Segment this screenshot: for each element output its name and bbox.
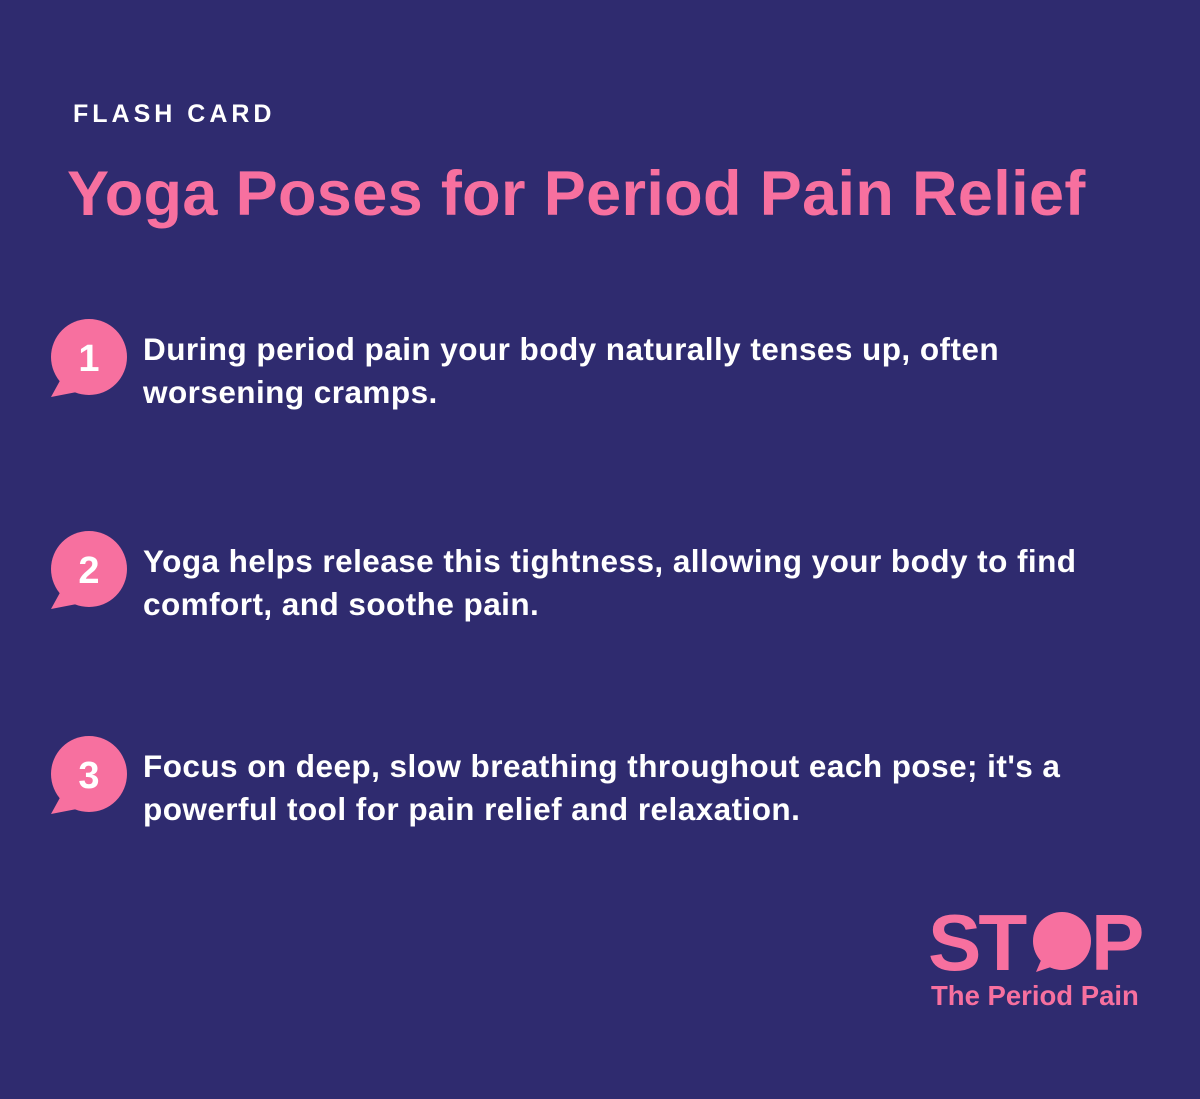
icon: bubble 3: 3 (78, 755, 100, 797)
logo (928, 900, 1144, 1011)
text 3: powerful tool for pain relief and relaxation. (143, 791, 800, 827)
label: flash card: FLASH CARD (73, 100, 276, 128)
icon: bubble 1 (51, 319, 127, 397)
text 1: During period pain your body naturally tenses up, often (143, 331, 999, 367)
icon: bubble 3 (51, 736, 127, 814)
text 2 (143, 543, 1076, 622)
logo: ST (928, 900, 1027, 987)
item 3 (51, 736, 1060, 827)
item 2 (51, 531, 1076, 622)
logo: P (1091, 900, 1144, 987)
item 1 (51, 319, 999, 410)
text 1 (142, 331, 999, 410)
text 2: Yoga helps release this tightness, allowing your body to find (143, 543, 1076, 579)
text 3 (143, 748, 1060, 827)
logo: The Period Pain (931, 980, 1139, 1011)
icon: bubble 1: 1 (78, 338, 100, 380)
icon: bubble 2: 2 (78, 550, 100, 592)
text 3: Focus on deep, slow breathing throughout each pose; it's a (143, 748, 1060, 784)
text 2: comfort, and soothe pain. (143, 586, 539, 622)
title: Yoga Poses for Period Pain Relief (67, 159, 1086, 229)
text 1: worsening cramps. (143, 374, 438, 410)
icon: bubble 2 (51, 531, 127, 609)
